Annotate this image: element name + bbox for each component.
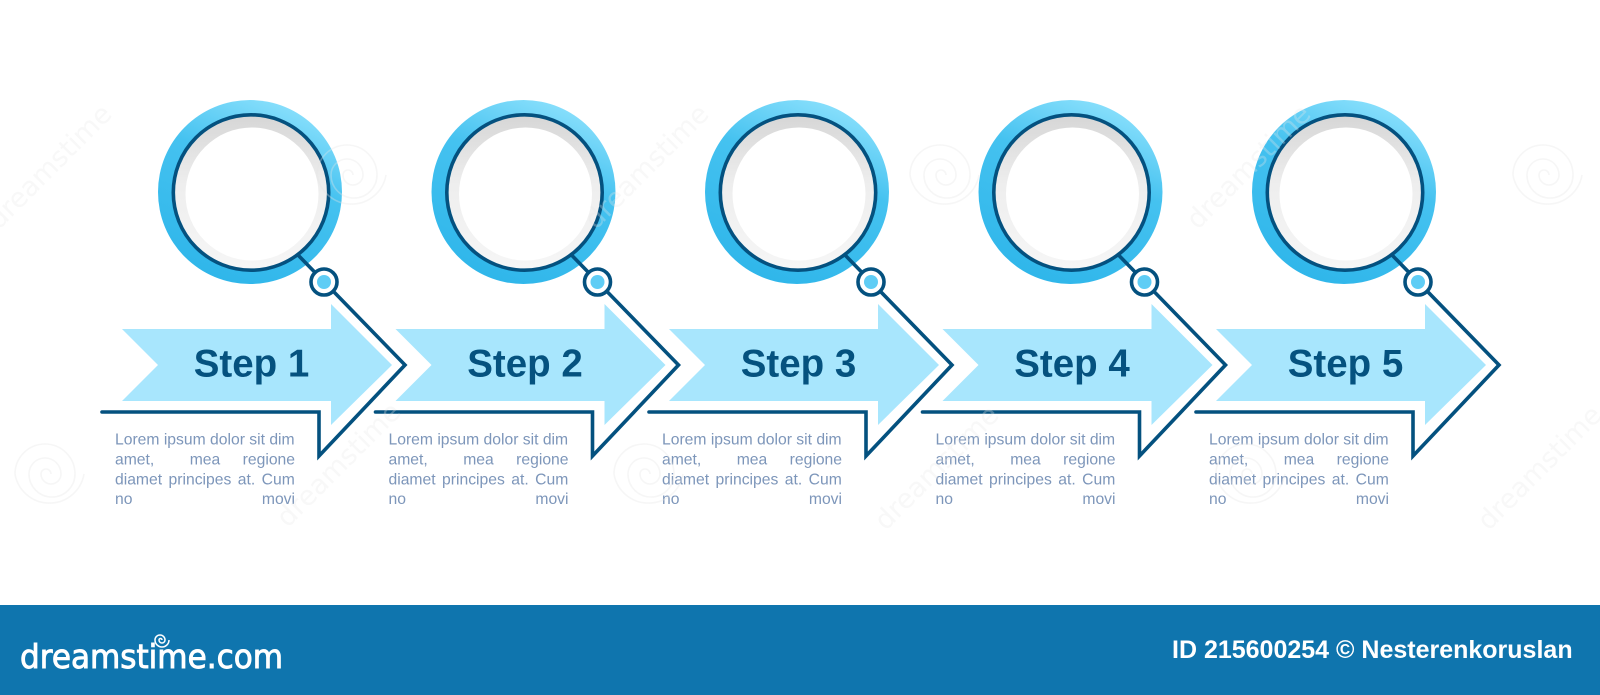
step 1 arrow [122,304,392,425]
step 1 node [311,269,337,295]
step 3 heading: Step 3 [741,342,856,386]
step 1 body text: amet, [115,452,154,468]
step 5 body text: mea [1284,452,1315,468]
step 5 circle badge [1252,100,1436,284]
step 4 body text: amet, [936,452,975,468]
step 3 body text [662,432,842,508]
step 1 body text: no [115,491,133,508]
step 3 body text: movi [809,491,842,508]
step 3 body text: no [662,491,680,508]
step 2 node [584,269,610,295]
step 4 body text [936,432,1116,508]
step 4 circle badge [978,100,1162,284]
footer image id and author: ID 215600254 © Nesterenkoruslan [1172,636,1573,664]
step 2 body text: amet, [388,452,428,468]
step 2 body text: diamet principes at. Cum [388,472,568,488]
watermark overlay: dreamstime [1181,99,1317,235]
step 4 body text: mea [1010,452,1041,468]
step 4 [922,100,1226,508]
step 1 body text: Lorem ipsum dolor sit dim [115,432,295,449]
step 5 body text: diamet principes at. Cum [1209,472,1389,488]
step 2 body text: mea [463,452,494,468]
footer bar [0,605,1600,695]
step 2 [376,100,678,508]
step 3 body text: Lorem ipsum dolor sit dim [662,432,842,449]
watermark overlay [0,99,1600,536]
step 5 body text: no [1209,491,1227,508]
watermark overlay: dreamstime [271,397,407,533]
step 2 body text [388,432,569,508]
step 3 outline connector [649,255,952,456]
watermark overlay: dreamstime [869,400,1005,536]
step 5 outline connector [1196,255,1499,456]
step 3 node [858,269,884,295]
step 4 body text: diamet principes at. Cum [936,472,1115,488]
step 5 heading: Step 5 [1288,342,1403,386]
step 1 heading: Step 1 [194,342,309,386]
footer logo: dreamstime.com [20,638,283,676]
step 2 heading: Step 2 [467,342,583,386]
step 5 body text: amet, [1209,452,1248,468]
step 1 body text: diamet principes at. Cum [115,472,295,488]
step 2 circle badge [432,100,616,284]
step 4 node [1132,269,1158,295]
step 5 node [1405,269,1431,295]
step 5 body text [1209,432,1389,508]
step 5 body text: regione [1337,452,1389,468]
step 4 body text: movi [1082,491,1116,508]
step 3 body text: diamet principes at. Cum [662,472,842,488]
step 4 body text: Lorem ipsum dolor sit dim [936,432,1115,449]
watermark overlay: dreamstime [579,99,715,235]
step 3 body text: regione [790,452,842,468]
step 1 outline connector [102,255,405,456]
step 1 body text: regione [243,452,295,468]
step 2 arrow [396,304,666,425]
step 2 body text: regione [516,452,569,468]
step 4 heading: Step 4 [1014,342,1130,386]
step 5 body text: movi [1356,491,1389,508]
step 2 body text: movi [535,491,568,508]
step 3 arrow [669,304,939,425]
step 1 body text: mea [190,452,221,468]
step 3 [649,100,952,508]
step 1 [102,100,405,508]
step 1 body text: movi [262,491,295,508]
step 5 arrow [1216,304,1486,425]
step 1 body text [115,432,295,508]
step 1 circle badge [158,100,342,284]
step 3 body text: mea [737,452,768,468]
step 4 body text: regione [1063,452,1116,468]
step 4 body text: no [936,491,953,508]
step 2 body text: Lorem ipsum dolor sit dim [388,432,568,449]
step 5 [1196,100,1499,508]
step 4 arrow [942,304,1212,425]
step 2 outline connector [376,255,678,456]
step 3 body text: amet, [662,452,701,468]
step 5 body text: Lorem ipsum dolor sit dim [1209,432,1389,449]
step 4 outline connector [922,255,1226,456]
step 3 circle badge [705,100,889,284]
step 2 body text: no [388,491,406,508]
